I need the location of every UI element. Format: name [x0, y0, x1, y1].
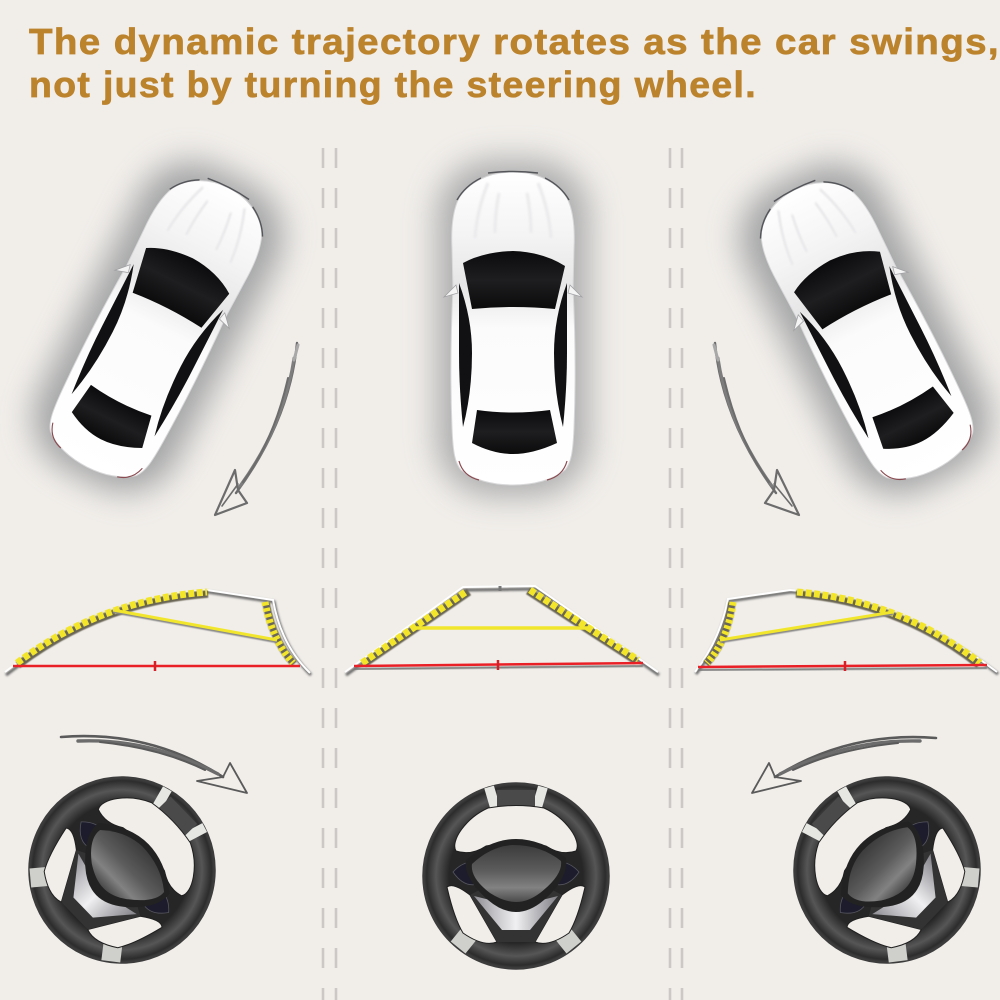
title: [29, 21, 1000, 105]
arrow: wheel turn right side: [752, 737, 936, 793]
trajectory: left: [5, 590, 311, 675]
car: swung right: [721, 145, 1000, 513]
steering wheel: turned left: [755, 738, 1000, 1000]
trajectory: centre: [345, 586, 659, 675]
trajectory: right: [695, 590, 998, 674]
arrow: car swing right: [714, 343, 799, 515]
title: not just by turning the steering wheel.: [29, 64, 757, 105]
steering wheel: turned right: [0, 738, 254, 1000]
car: swung left: [14, 143, 302, 511]
steering wheel: centred: [423, 783, 609, 969]
title: The dynamic trajectory rotates as the car swings,: [29, 21, 1000, 62]
arrow: wheel turn left side: [61, 736, 247, 793]
arrow: car swing left: [215, 343, 298, 515]
car: straight: [437, 160, 589, 496]
